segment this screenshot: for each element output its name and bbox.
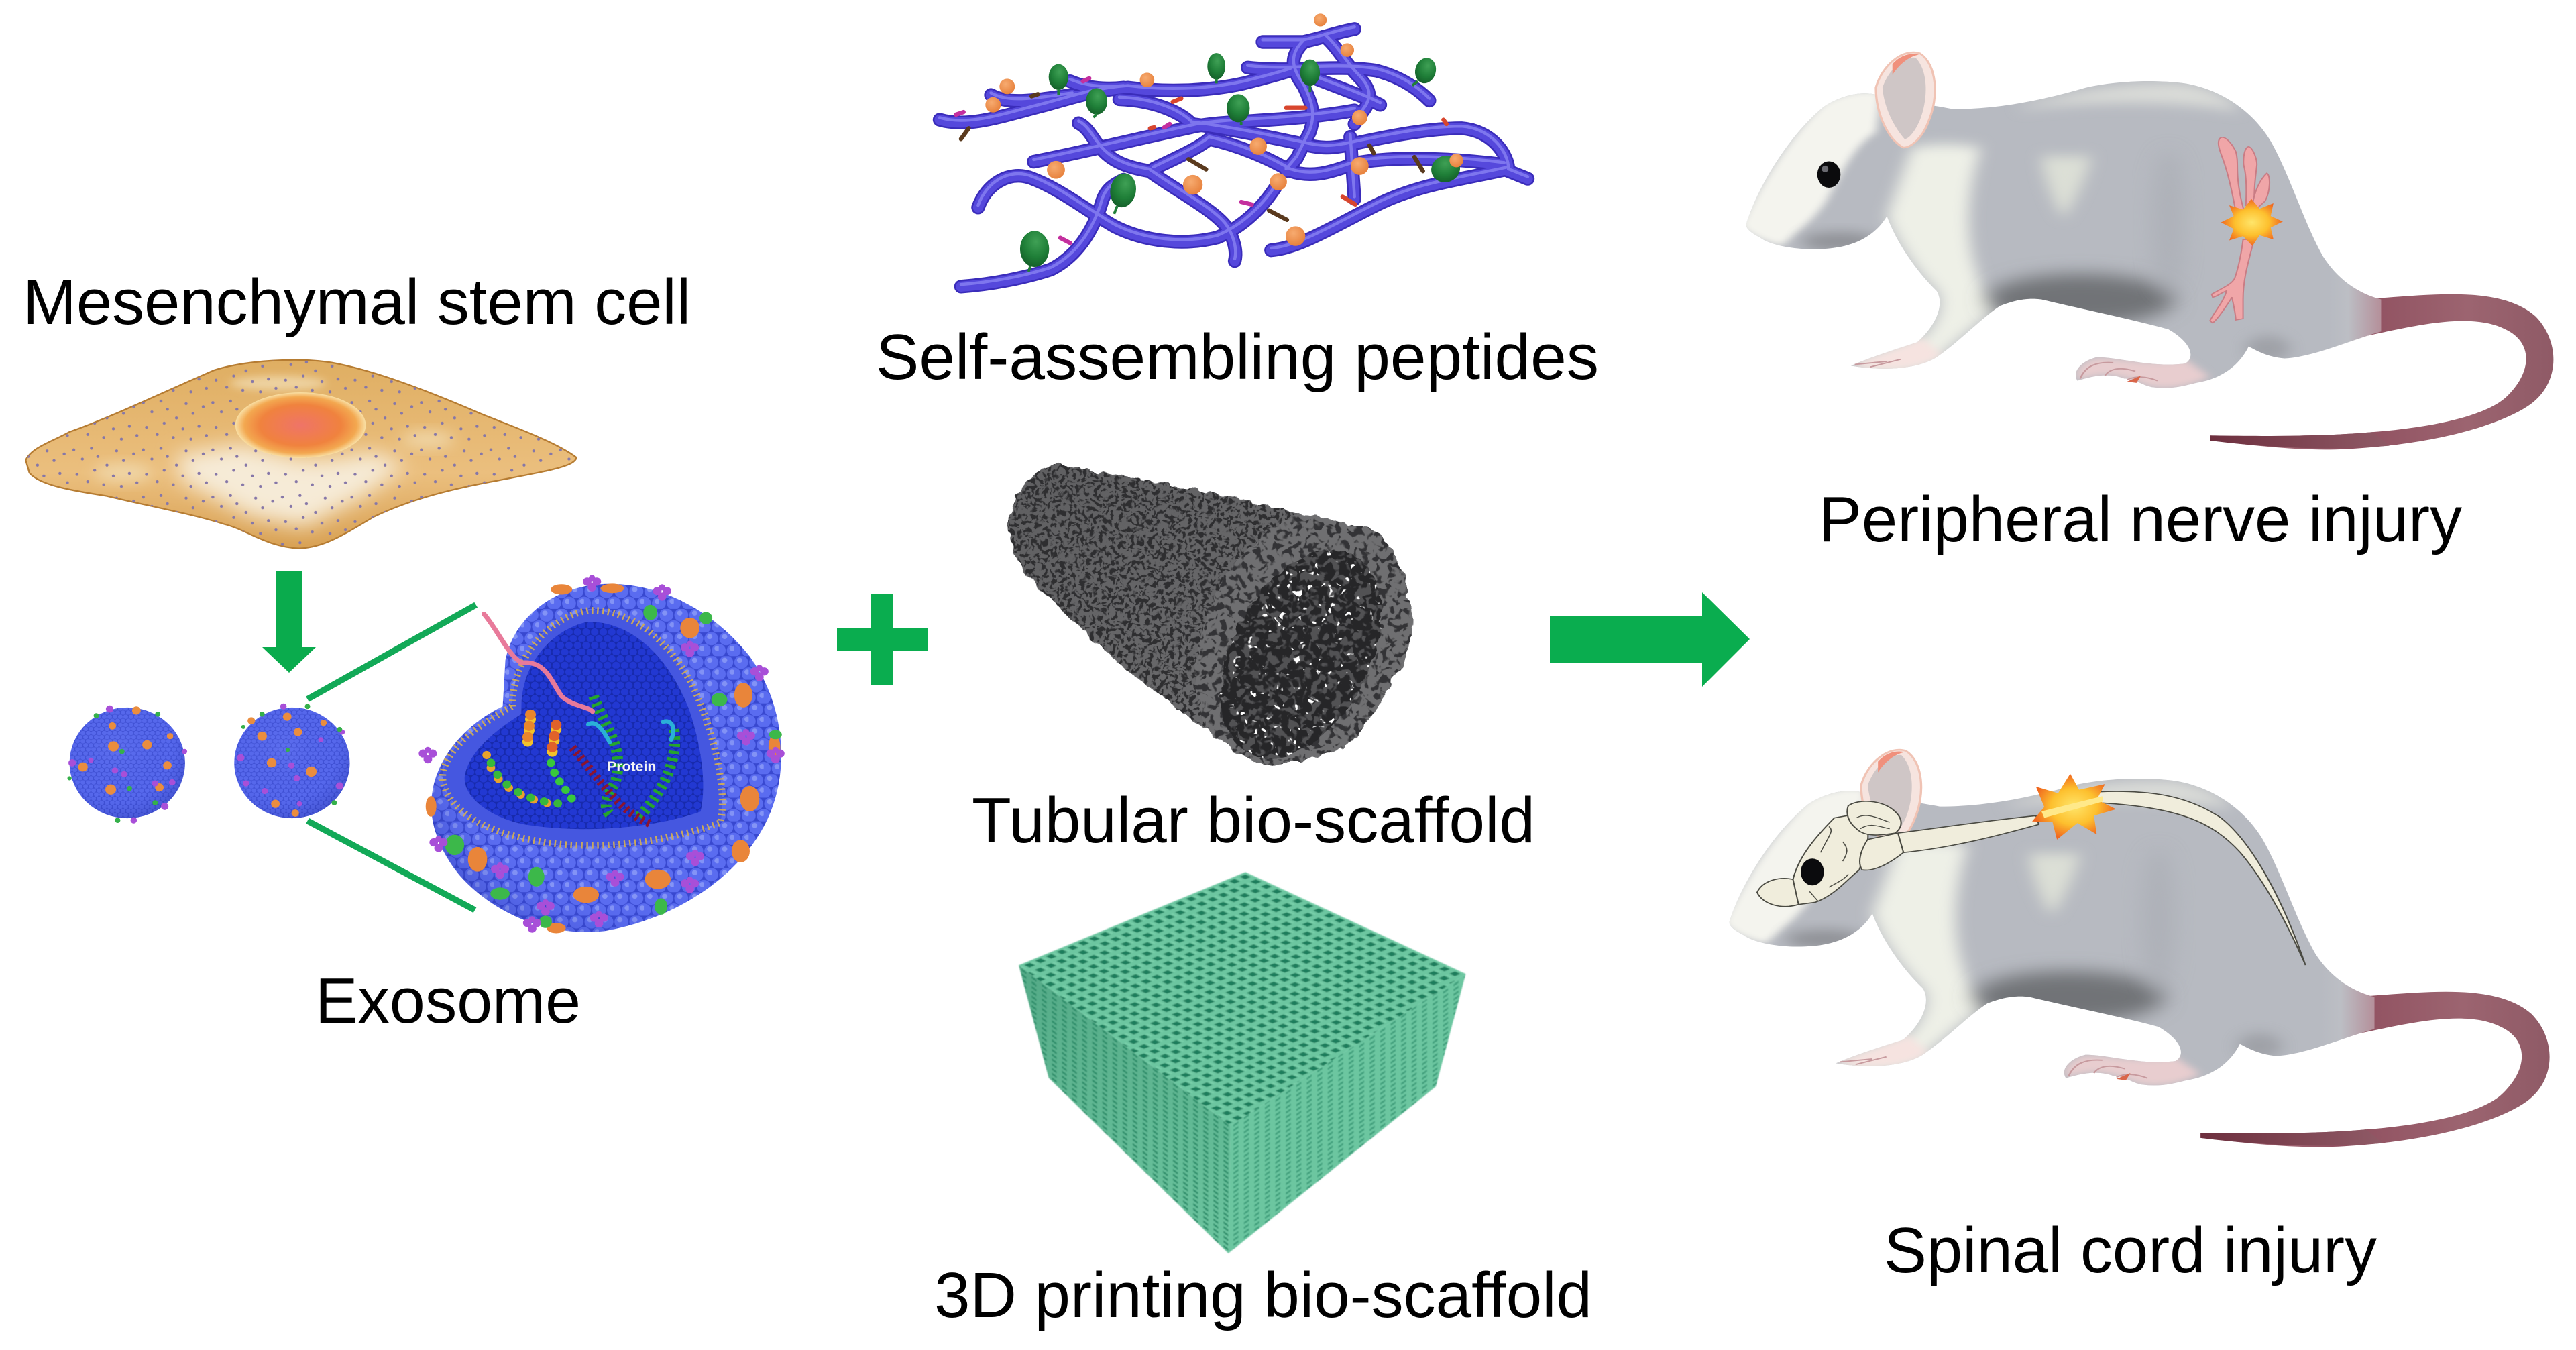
orange beads — [985, 13, 1463, 246]
nucleus — [235, 392, 366, 458]
rat — [1740, 52, 2553, 449]
green balloon groups — [1020, 53, 1464, 267]
panel: mesenchymal stem cell illustration — [25, 359, 577, 549]
heading: peripheral nerve injury: Peripheral nerve injury — [1819, 484, 2462, 555]
panel: exosome cutaway — [418, 575, 785, 933]
panel: 3D printed lattice scaffold — [1019, 872, 1466, 1253]
icon: plus sign — [837, 594, 928, 685]
nucleic acid strands — [484, 614, 675, 824]
outer shell — [431, 584, 781, 932]
coarse foam around the opening — [1194, 514, 1414, 766]
right face — [1229, 974, 1466, 1253]
icon: exosome sphere 2 — [234, 704, 349, 818]
cell body — [25, 360, 577, 549]
cavity — [465, 622, 703, 829]
panel: rat with peripheral nerve injury — [1740, 52, 2553, 449]
label: protein: Protein — [607, 760, 656, 775]
injury burst — [2221, 199, 2283, 246]
heading: 3D printing bio-scaffold: 3D printing bio-scaffold — [934, 1259, 1592, 1331]
short side chains — [956, 78, 1447, 243]
icon: exosome sphere 1 — [67, 706, 187, 824]
peptide fibres — [940, 27, 1528, 286]
wall pores — [1007, 463, 1414, 766]
surface markers — [418, 575, 785, 933]
left face — [1019, 965, 1231, 1253]
rat — [1724, 750, 2550, 1147]
arrow: combination to outcome — [1550, 592, 1750, 687]
heading: mesenchymal stem cell: Mesenchymal stem cell — [23, 266, 691, 338]
balloon stems — [1029, 78, 1418, 272]
heading: exosome: Exosome — [315, 965, 581, 1037]
panel: self-assembling peptide network — [940, 13, 1528, 286]
heading: tubular bio-scaffold: Tubular bio-scaffold — [972, 785, 1535, 856]
tube wall — [1007, 463, 1414, 766]
panel: rat with spinal cord injury — [1724, 750, 2550, 1147]
injury burst — [2032, 774, 2116, 840]
eye — [1801, 858, 1824, 885]
brain and spinal cord — [1757, 774, 2306, 965]
top face — [1019, 872, 1466, 1125]
heading: spinal cord injury: Spinal cord injury — [1884, 1215, 2377, 1286]
membrane band — [443, 610, 722, 846]
panel: tubular bio-scaffold — [1007, 463, 1414, 766]
zoom lines: sphere to exosome cutaway — [308, 605, 476, 910]
peripheral nerve — [2210, 137, 2270, 323]
cytoplasm highlights and vesicle dots — [27, 361, 571, 546]
arrow: cell to exosome — [262, 571, 316, 673]
shell shading — [431, 584, 781, 932]
tube interior — [1219, 549, 1383, 759]
heading: self-assembling peptides: Self-assembling peptides — [876, 321, 1599, 393]
